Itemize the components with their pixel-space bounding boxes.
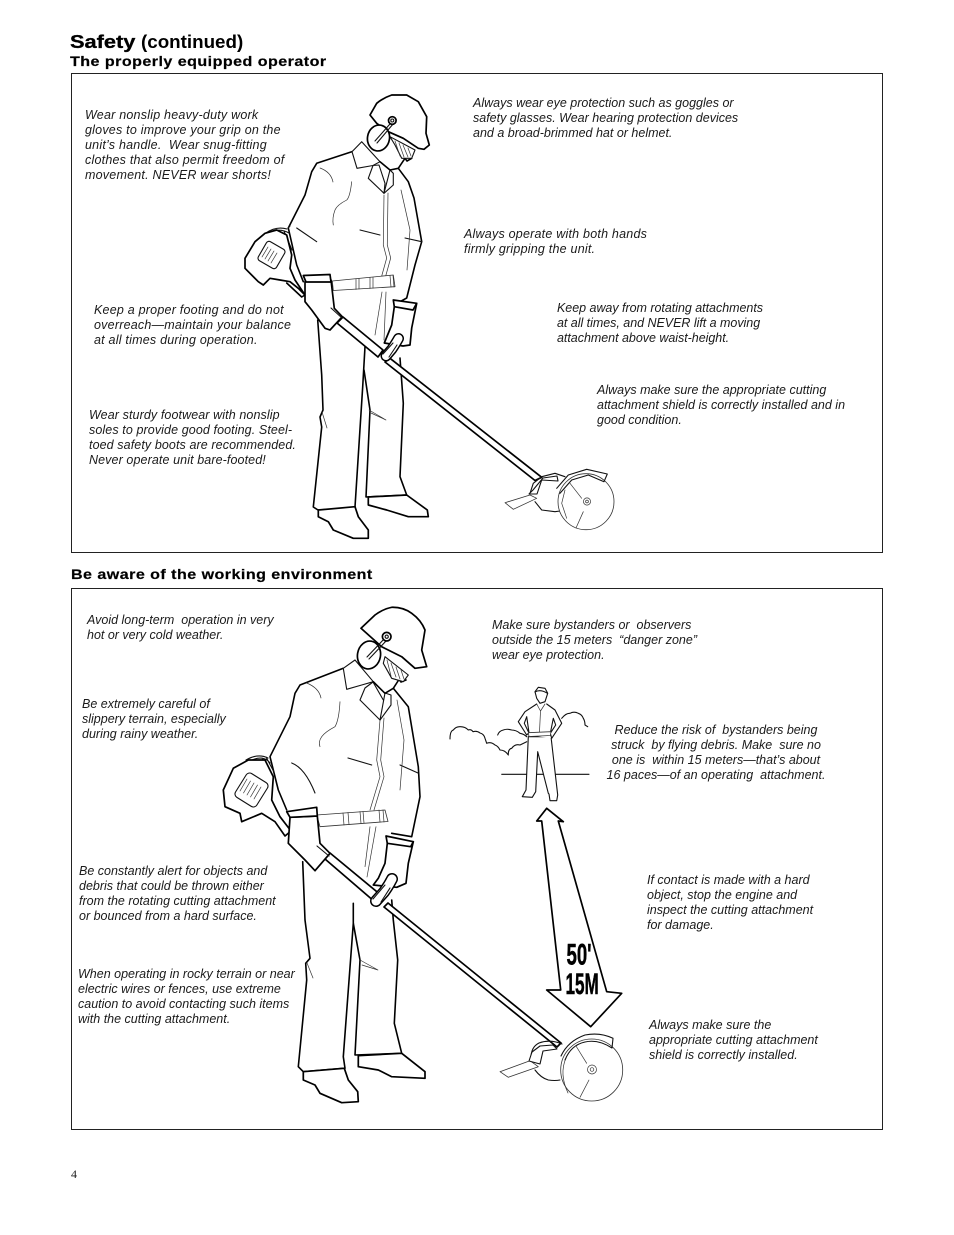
note: shield correctly installed: Always make sure the (649, 1018, 771, 1032)
shaft (337, 317, 542, 480)
engine housing (245, 226, 305, 297)
note: footwear: toed safety boots are recommended. (89, 438, 296, 452)
note: footing (94, 303, 291, 347)
distance arrow (537, 808, 622, 1027)
note: both hands (463, 227, 647, 256)
note: footwear: Never operate unit bare-footed! (89, 453, 266, 467)
title (70, 31, 243, 52)
note: gloves and clothing: clothes that also permit freedom of (85, 153, 284, 167)
note: hard object contact: If contact is made with a hard (647, 873, 810, 887)
note: flying debris: Reduce the risk of bystanders being (615, 723, 817, 737)
note: flying debris: struck by flying debris. Make sure no (611, 738, 821, 752)
clouds (450, 712, 588, 755)
right glove (384, 300, 417, 346)
note: shield installed: Always make sure the appropriate cutting (597, 383, 826, 397)
label: 50 feet: 50' (566, 938, 592, 972)
note: footwear (89, 408, 296, 467)
label: 15 meters: 15M (566, 968, 599, 1001)
boots (318, 495, 428, 538)
note: rotating attachments: Keep away from rotating attachments (557, 301, 763, 315)
page number: 4 (71, 1167, 77, 1181)
cutting attachment and shield (500, 1034, 623, 1101)
note: rotating attachments: attachment above waist-height. (557, 331, 729, 345)
helmet, ear muffs and goggles (365, 95, 429, 170)
left glove and cuff (303, 274, 342, 330)
ground line (502, 773, 589, 775)
note: eye protection: safety glasses. Wear hearing protection devices (473, 111, 738, 125)
note: bystander eye protection: wear eye protection. (492, 648, 605, 662)
right glove (373, 836, 413, 887)
note: slippery terrain: Be extremely careful of (82, 697, 210, 711)
note: eye protection: and a broad-brimmed hat or helmet. (473, 126, 672, 140)
note: rocky terrain: When operating in rocky terrain or near (78, 967, 295, 981)
note: flying debris (606, 723, 825, 782)
belt (332, 275, 395, 290)
note: slippery terrain: during rainy weather. (82, 727, 198, 741)
note: flying debris: one is within 15 meters—that’s about (612, 753, 820, 767)
illustration: bystander with clouds and ground line (450, 687, 622, 1027)
title: (continued) (141, 31, 243, 52)
note: bystander eye protection: outside the 15 meters “danger zone” (492, 633, 697, 647)
note: shield correctly installed: shield is correctly installed. (649, 1048, 798, 1062)
note: alert for objects: from the rotating cutting attachment (79, 894, 276, 908)
illustration: operator with trimmer, bottom panel (223, 607, 623, 1103)
bystander figure (518, 687, 562, 801)
note: shield installed (596, 383, 845, 427)
title: Safety (70, 31, 135, 52)
note: weather: Avoid long-term operation in very (87, 613, 274, 627)
trousers (298, 827, 402, 1072)
cutting attachment and shield (505, 469, 614, 530)
note: gloves and clothing: Wear nonslip heavy-duty work (85, 108, 258, 122)
note: alert for objects (79, 864, 276, 923)
note: weather (86, 613, 274, 642)
trousers (313, 292, 407, 510)
helmet, ear muffs and goggles (355, 607, 427, 693)
jacket (288, 142, 422, 302)
note: bystander eye protection: Make sure bystanders or observers (492, 618, 691, 632)
note: hard object contact: object, stop the engine and (647, 888, 797, 902)
belt (317, 810, 388, 827)
note: rocky terrain: electric wires or fences, use extreme (78, 982, 281, 996)
loop handle (383, 338, 398, 357)
note: footing: Keep a proper footing and do not (94, 303, 284, 317)
note: rotating attachments: at all times, and NEVER lift a moving (557, 316, 760, 330)
note: alert for objects: debris that could be thrown either (79, 879, 264, 893)
note: footing: overreach—maintain your balance (94, 318, 291, 332)
note: hard object contact: inspect the cutting attachment (647, 903, 813, 917)
shaft (325, 853, 561, 1047)
note: slippery terrain (82, 697, 226, 741)
note: flying debris: 16 paces—of an operating attachment. (607, 768, 825, 782)
note: shield installed: attachment shield is correctly installed and in (597, 398, 845, 412)
panel: equipped operator frame (71, 73, 883, 553)
note: both hands: firmly gripping the unit. (464, 242, 595, 256)
boots (303, 1053, 425, 1103)
note: rotating attachments (557, 301, 763, 345)
note: shield correctly installed (648, 1018, 818, 1062)
note: weather: hot or very cold weather. (87, 628, 223, 642)
engine housing (223, 756, 291, 836)
note: hard object contact (647, 873, 814, 932)
panel: working environment frame (71, 588, 883, 1130)
note: alert for objects: or bounced from a hard surface. (79, 909, 257, 923)
note: bystander eye protection (492, 618, 698, 662)
jacket (270, 660, 420, 837)
collar (343, 660, 391, 720)
note: alert for objects: Be constantly alert for objects and (79, 864, 267, 878)
note: gloves and clothing: unit’s handle. Wear snug-fitting (85, 138, 267, 152)
note: gloves and clothing: gloves to improve your grip on the (85, 123, 281, 137)
note: footwear: soles to provide good footing. Steel- (89, 423, 292, 437)
note: eye protection (472, 96, 738, 140)
note: shield correctly installed: appropriate cutting attachment (649, 1033, 818, 1047)
note: footwear: Wear sturdy footwear with nonslip (89, 408, 280, 422)
note: slippery terrain: slippery terrain, especially (82, 712, 226, 726)
note: gloves and clothing: movement. NEVER wear shorts! (85, 168, 271, 182)
note: shield installed: good condition. (597, 413, 682, 427)
note: both hands: Always operate with both hands (464, 227, 647, 241)
left glove and cuff (287, 807, 330, 871)
loop handle (373, 879, 392, 902)
note: rocky terrain: with the cutting attachment. (78, 1012, 230, 1026)
note: rocky terrain (78, 967, 296, 1026)
heading: the properly equipped operator: The properly equipped operator (70, 54, 327, 69)
heading: be aware of the working environment: Be aware of the working environment (71, 567, 373, 582)
note: footing: at all times during operation. (94, 333, 258, 347)
note: eye protection: Always wear eye protection such as goggles or (473, 96, 734, 110)
note: gloves and clothing (85, 108, 286, 182)
collar (352, 142, 393, 193)
note: rocky terrain: caution to avoid contacting such items (78, 997, 289, 1011)
note: hard object contact: for damage. (647, 918, 714, 932)
